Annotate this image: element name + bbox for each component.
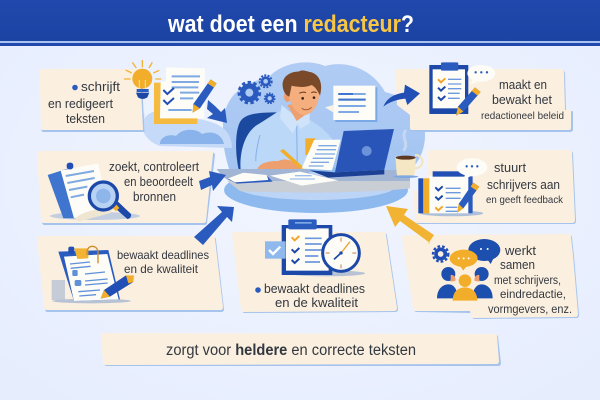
panel: stuurt schrijvers aan xyxy=(413,150,576,224)
floating note xyxy=(325,105,333,112)
icon: clipboard with paperclip and pencil xyxy=(52,246,134,303)
icon: clipboard with speech bubble xyxy=(429,62,495,116)
summary text: zorgt voor heldere en correcte teksten xyxy=(166,342,416,359)
laptop xyxy=(335,129,394,172)
panel text: teksten xyxy=(66,112,105,126)
arrow: middle left xyxy=(199,171,226,191)
panel text xyxy=(117,248,209,276)
panel text: met schrijvers, xyxy=(494,275,561,287)
panel text: maakt en xyxy=(499,78,547,92)
panel text: en beoordeelt xyxy=(124,175,193,189)
title: wat doet een redacteur? xyxy=(167,11,414,38)
chair xyxy=(236,112,277,172)
panel text: bewakt het xyxy=(492,93,553,107)
forearm and hand xyxy=(241,161,280,174)
bullet xyxy=(255,287,261,293)
panel text: schrijft xyxy=(81,80,121,94)
panel text: en geeft feedback xyxy=(486,194,564,206)
panel: bewaakt deadlines (center) xyxy=(232,232,398,313)
icon: checklist and clock xyxy=(265,219,365,276)
arrow: lower left xyxy=(194,206,234,245)
central blue cloud background xyxy=(134,62,425,213)
panel text: werkt xyxy=(504,244,537,258)
desk xyxy=(217,169,410,182)
panel text: vormgevers, enz. xyxy=(488,302,572,316)
panel: bewaakt deadlines (left) xyxy=(37,236,224,312)
panel: werkt samen xyxy=(402,234,579,319)
notebooks xyxy=(228,173,273,184)
panel text: schrijvers aan xyxy=(487,178,560,192)
document in hand xyxy=(305,138,315,155)
head xyxy=(284,91,291,102)
bullet xyxy=(72,85,78,90)
icon: team with speech bubbles and gear xyxy=(433,239,500,301)
panel text: bewaakt deadlines xyxy=(264,281,365,296)
panel: bottom summary xyxy=(101,333,501,366)
icon: coffee mug with steam xyxy=(393,130,422,178)
panel text: stuurt xyxy=(494,161,527,175)
icon: book and magnifier xyxy=(48,163,140,222)
panel text: en de kwaliteit xyxy=(124,262,199,276)
panel text: zoekt, controleert xyxy=(109,160,199,174)
panel text xyxy=(486,161,564,206)
panel: maakt en bewakt xyxy=(395,69,573,132)
panel text xyxy=(48,80,121,126)
panel text: en de kwaliteit xyxy=(275,295,358,310)
header banner xyxy=(0,0,600,46)
yellow pencil xyxy=(280,149,304,170)
panel: zoekt, controleert xyxy=(37,151,215,225)
panel text xyxy=(481,78,564,122)
arrow: top left xyxy=(207,100,227,123)
panel text xyxy=(488,244,572,316)
panel text: bewaakt deadlines xyxy=(117,248,209,262)
arrow: lower right xyxy=(386,206,434,244)
icon: light bulb, document and pencil xyxy=(124,60,217,124)
panel text: eindredactie, xyxy=(500,287,566,301)
icon: clipboard with feedback bubble xyxy=(418,158,487,216)
editor at desk illustration xyxy=(217,71,410,192)
panel text xyxy=(109,160,199,204)
panel: schrijft en redigeert teksten xyxy=(39,69,144,132)
gears xyxy=(239,75,275,103)
panel text: en redigeert xyxy=(48,97,114,111)
panel text: samen xyxy=(500,258,535,272)
panel text: bronnen xyxy=(133,190,176,204)
torso xyxy=(240,110,333,172)
panel text: redactioneel beleid xyxy=(481,110,564,122)
panel text xyxy=(264,281,365,310)
arrow: top right xyxy=(383,85,420,107)
